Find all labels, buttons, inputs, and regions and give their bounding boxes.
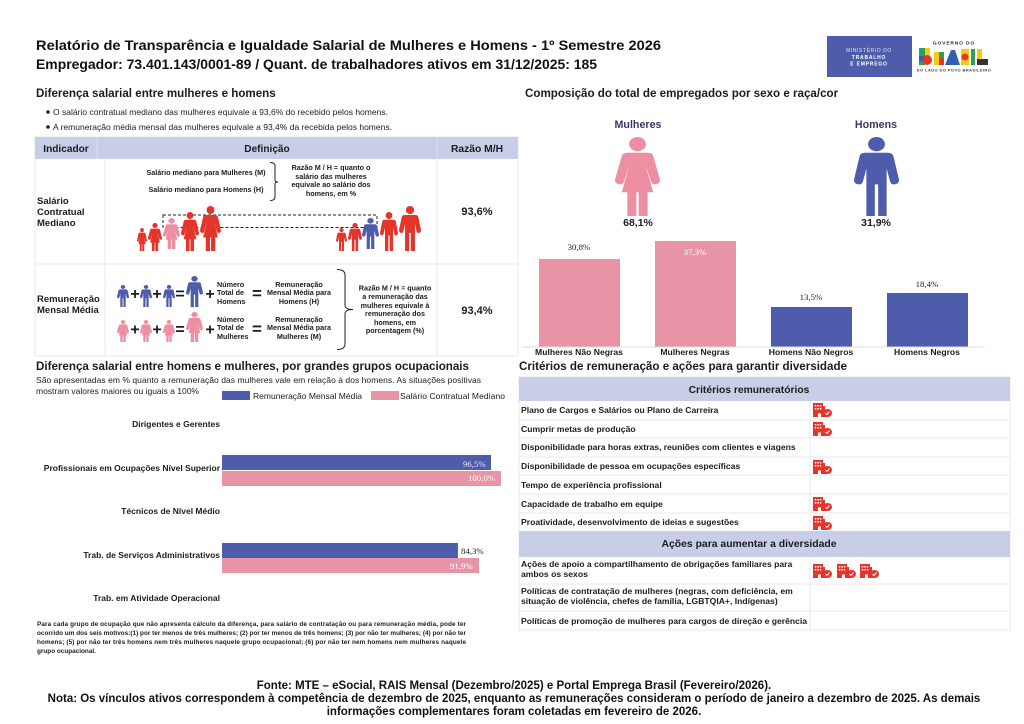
definition: fórmula texto: Remuneração — [275, 315, 323, 324]
bar chart: raça/cor: 37,3% — [684, 247, 707, 257]
bar chart: raça/cor: Homens Não Negros — [769, 347, 853, 357]
criteria rows: Tempo de experiência profissional — [521, 480, 662, 490]
definition: remuneração homens: + — [152, 286, 162, 303]
subtitle: mostram valores maiores ou iguais a 100% — [36, 386, 199, 396]
panel: indicator table: Salário — [37, 196, 69, 207]
bar chart: raça/cor: 30,8% — [568, 242, 591, 252]
definition: salário mediano: Razão M / H = quanto o — [292, 163, 371, 172]
heading: grupos ocupacionais: Diferença salarial entre homens e mulheres, por grandes grupos ocupacionais — [36, 360, 469, 373]
panel: indicator table: 93,6% — [461, 206, 493, 218]
criteria rows: Proatividade, desenvolvimento de ideias e sugestões — [521, 517, 739, 527]
definition: salário mediano: equivale ao salário dos — [291, 180, 371, 189]
definition: remuneração homens: = — [252, 284, 262, 303]
bar chart: grupos ocupacionais: Dirigentes e Gerentes — [132, 419, 220, 429]
definition: fórmula texto: Mulheres — [217, 332, 249, 341]
definition: fórmula texto: porcentagem (%) — [366, 326, 425, 335]
panel: indicator table: Mensal Média — [37, 305, 99, 316]
criteria rows — [521, 405, 807, 626]
definition: salário mediano — [146, 162, 377, 228]
definition: remuneração homens: = — [175, 286, 185, 303]
definition: fórmula texto — [217, 270, 432, 350]
subtitle: São apresentadas em % quanto a remuneração das mulheres vale em relação à dos homens. As situações positivas — [36, 375, 481, 385]
bar chart: grupos ocupacionais: Técnicos de Nível Médio — [121, 506, 220, 516]
definition: remuneração mulheres: + — [130, 322, 140, 338]
criteria rows: Cumprir metas de produção — [521, 424, 636, 434]
panel: critérios table: Critérios remuneratórios — [689, 385, 810, 396]
bar chart: grupos ocupacionais: 91,9% — [450, 561, 473, 571]
source note: Fonte: MTE – eSocial, RAIS Mensal (Dezembro/2025) e Portal Emprega Brasil (Fevereiro/2026). — [257, 680, 771, 692]
legend — [222, 391, 505, 401]
criteria rows: ambos os sexos — [521, 569, 588, 579]
bar chart: raça/cor: Homens Negros — [894, 347, 960, 357]
definition: fórmula texto: Total de — [217, 288, 244, 297]
bar chart: grupos ocupacionais: 84,3% — [461, 546, 484, 556]
criteria rows: Plano de Cargos e Salários ou Plano de Carreira — [521, 405, 718, 415]
bullets — [46, 107, 392, 132]
panel: indicator table: Remuneração — [37, 294, 100, 305]
definition: fórmula texto: Mulheres (M) — [277, 332, 322, 341]
definition: fórmula texto: Número — [217, 280, 245, 289]
definition: salário mediano: Salário mediano para Homens (H) — [148, 185, 264, 194]
definition: salário mediano: salário das mulheres — [295, 172, 367, 181]
source note: informações complementares foram coletadas em fevereiro de 2026. — [327, 706, 701, 718]
bullets: A remuneração média mensal das mulheres equivale a 93,4% da recebida pelos homens. — [53, 122, 392, 132]
criteria rows: Ações de apoio a compartilhamento de obrigações familiares para — [521, 559, 792, 569]
definition: remuneração homens — [117, 276, 262, 307]
definition: fórmula texto: Homens — [217, 297, 245, 306]
criteria rows: Capacidade de trabalho em equipe — [521, 499, 663, 509]
definition: fórmula texto: remuneração dos — [365, 309, 425, 318]
panel: indicator table: 93,4% — [461, 305, 493, 317]
definition: remuneração mulheres: + — [205, 322, 215, 338]
definition: fórmula texto: mulheres equivale à — [361, 301, 430, 310]
figure: homens — [854, 119, 899, 229]
logo: ministério: E EMPREGO — [850, 62, 888, 68]
definition: fórmula texto: Mensal Média para — [267, 323, 332, 332]
logo: ministério — [827, 36, 912, 77]
definition: fórmula texto: Remuneração — [275, 280, 323, 289]
criteria rows: Políticas de promoção de mulheres para cargos de direção e gerência — [521, 616, 807, 626]
bar chart: raça/cor: Mulheres Não Negras — [535, 347, 623, 357]
logo: governo do brasil: GOVERNO DO — [933, 40, 975, 46]
bar chart: raça/cor: 13,5% — [800, 292, 823, 302]
footnote: grupo ocupacional. — [37, 648, 96, 655]
title: Relatório de Transparência e Igualdade Salarial de Mulheres e Homens - 1º Semestre 2026 — [36, 37, 661, 53]
logo: ministério: TRABALHO — [852, 55, 886, 61]
source note: Nota: Os vínculos ativos correspondem à competência de dezembro de 2025, enquanto as remunerações consideram o período de janeiro a dezembro de 2025. As demais — [48, 693, 980, 705]
definition: fórmula texto: Homens (H) — [279, 297, 320, 306]
definition: fórmula texto: homens, em — [374, 318, 416, 327]
bar chart: grupos ocupacionais: Profissionais em Ocupações Nível Superior — [44, 463, 221, 473]
bar chart: raça/cor — [522, 241, 985, 357]
bar chart: grupos ocupacionais: Trab. em Atividade Operacional — [93, 593, 220, 603]
panel: indicator table: Definição — [244, 144, 290, 155]
bar chart: grupos ocupacionais — [44, 419, 501, 603]
footnote — [37, 621, 466, 655]
figure: mulheres: 68,1% — [623, 217, 654, 229]
footnote: homens; (5) por não ter três homens nem três mulheres naquele grupo ocupacional; (6) por não ter nem homens nem mulheres naquele — [37, 639, 466, 646]
icons: mulheres mediana — [137, 206, 221, 251]
bar chart: grupos ocupacionais: 96,5% — [463, 459, 486, 469]
heading: diferença salarial: Diferença salarial entre mulheres e homens — [36, 87, 276, 100]
title: Empregador: 73.401.143/0001-89 / Quant. de trabalhadores ativos em 31/12/2025: 185 — [36, 56, 597, 72]
icons: homens mediana — [336, 206, 421, 251]
panel: critérios table: Ações para aumentar a diversidade — [662, 539, 837, 550]
definition: fórmula texto: Mensal Média para — [267, 288, 332, 297]
heading: critérios: Critérios de remuneração e ações para garantir diversidade — [519, 360, 848, 373]
definition: fórmula texto: Razão M / H = quanto — [359, 284, 432, 292]
heading: composição: Composição do total de empregados por sexo e raça/cor — [525, 87, 839, 100]
criteria rows: Políticas de contratação de mulheres (negras, com deficiência, em — [521, 586, 793, 596]
bar chart: raça/cor: 18,4% — [916, 279, 939, 289]
bar chart: grupos ocupacionais: 100,0% — [468, 473, 496, 483]
panel: indicator table: Mediano — [37, 218, 76, 229]
logo: ministério: MINISTÉRIO DO — [846, 47, 892, 54]
criteria rows: situação de violência, chefes de família, LGBTQIA+, Indígenas) — [521, 596, 778, 606]
panel: indicator table: Contratual — [37, 207, 84, 218]
panel: indicator table: Indicador — [43, 144, 89, 155]
definition: remuneração mulheres: = — [175, 322, 185, 338]
bullets: O salário contratual mediano das mulheres equivale a 93,6% do recebido pelos homens. — [53, 107, 388, 117]
definition: remuneração mulheres — [117, 312, 262, 342]
definition: fórmula texto: Total de — [217, 323, 244, 332]
logo: governo do brasil — [917, 40, 991, 72]
figure: mulheres — [615, 119, 662, 229]
definition: remuneração homens: + — [130, 286, 140, 303]
criteria rows: Disponibilidade para horas extras, reuniões com clientes e viagens — [521, 442, 796, 452]
legend: Salário Contratual Mediano — [400, 391, 505, 401]
definition: fórmula texto: a remuneração das — [362, 292, 428, 301]
figure: homens: 31,9% — [861, 217, 892, 229]
panel: indicator table: Razão M/H — [451, 144, 503, 155]
footnote: Para cada grupo de ocupação que não apresenta cálculo da diferença, para salário de contratação ou para remuneração média, pode ter — [37, 621, 466, 628]
legend: Remuneração Mensal Média — [253, 391, 362, 401]
definition: remuneração mulheres: + — [152, 322, 162, 338]
bar chart: grupos ocupacionais: Trab. de Serviços Administrativos — [83, 550, 220, 560]
panel: critérios table — [519, 377, 1010, 630]
bar chart: raça/cor: Mulheres Negras — [660, 347, 730, 357]
title — [36, 37, 661, 72]
logo: governo do brasil: DO LADO DO POVO BRASILEIRO — [917, 68, 991, 72]
definition: fórmula texto: Número — [217, 315, 245, 324]
criteria rows: Disponibilidade de pessoa em ocupações específicas — [521, 461, 740, 471]
definition: remuneração homens: + — [205, 286, 215, 303]
source note — [48, 680, 980, 718]
figure: mulheres: Mulheres — [615, 119, 662, 131]
definition: salário mediano: Salário mediano para Mulheres (M) — [146, 168, 266, 177]
footnote: ocorrido um dos seis motivos:(1) por ter menos de três mulheres; (2) por ter menos de três homens; (3) por não ter mulheres; (4) por não ter — [37, 630, 466, 637]
icons: criteria checks — [813, 403, 879, 578]
definition: remuneração mulheres: = — [252, 320, 262, 338]
panel: indicator table — [35, 137, 518, 356]
subtitle — [36, 375, 481, 396]
definition: salário mediano: homens, em % — [306, 189, 357, 198]
figure: homens: Homens — [855, 119, 897, 131]
